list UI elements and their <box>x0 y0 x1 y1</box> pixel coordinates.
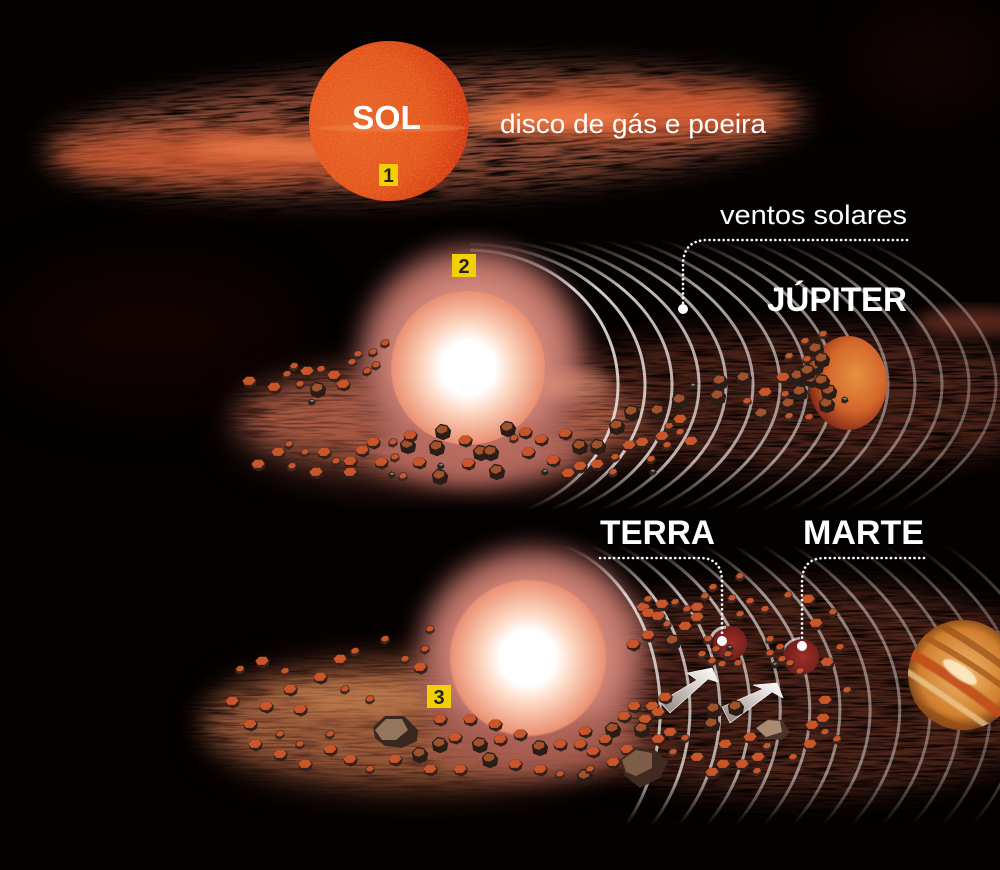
pink glow beneath sun 2 <box>370 420 580 484</box>
sun 1 <box>309 41 469 201</box>
panel 3: planets forming <box>205 514 1000 825</box>
label: TERRA: TERRA <box>600 514 715 552</box>
rocks 3 <box>226 573 851 784</box>
sun 2 <box>391 291 610 445</box>
halo 3 <box>418 547 648 763</box>
boulder centre <box>620 747 668 788</box>
leader: Marte <box>797 558 924 651</box>
sun 3 <box>450 580 606 736</box>
label: MARTE: MARTE <box>803 514 924 552</box>
boulder right <box>756 719 790 740</box>
label: JÚPITER: JÚPITER <box>767 281 907 319</box>
label: ventos solares: ventos solares <box>720 200 907 230</box>
disc 2 <box>240 372 640 477</box>
rocks 2 <box>243 331 849 484</box>
arrow to Marte <box>722 683 783 723</box>
planet: Marte <box>783 638 819 675</box>
solar wind arcs 3 <box>561 545 1000 825</box>
boulder left <box>373 716 418 748</box>
badge 3: 3 <box>433 687 445 709</box>
leader: Terra <box>600 558 727 646</box>
glow beneath sun 3 <box>425 713 645 777</box>
leader: ventos solares <box>678 240 907 314</box>
arrow to Terra <box>660 668 718 713</box>
badge 1: 1 <box>383 166 394 187</box>
label: disco de gás e poeira: disco de gás e poeira <box>500 109 767 139</box>
panel 1: gas and dust disc <box>42 41 808 214</box>
badge 2 <box>452 254 476 278</box>
badge 3 <box>427 685 451 709</box>
badge 2: 2 <box>458 256 470 278</box>
panel 2: young sun with solar winds <box>217 204 998 508</box>
planet: Jupiter young <box>809 336 887 430</box>
disc: outer dust <box>42 50 808 214</box>
planet: large Jupiter <box>905 620 1000 735</box>
label: SOL: SOL <box>352 99 421 136</box>
disc 3 <box>205 666 635 783</box>
solar wind arcs 2 <box>470 242 998 508</box>
badge 1 <box>379 164 398 187</box>
planet: Terra <box>710 626 747 660</box>
halo 2 <box>358 246 586 478</box>
